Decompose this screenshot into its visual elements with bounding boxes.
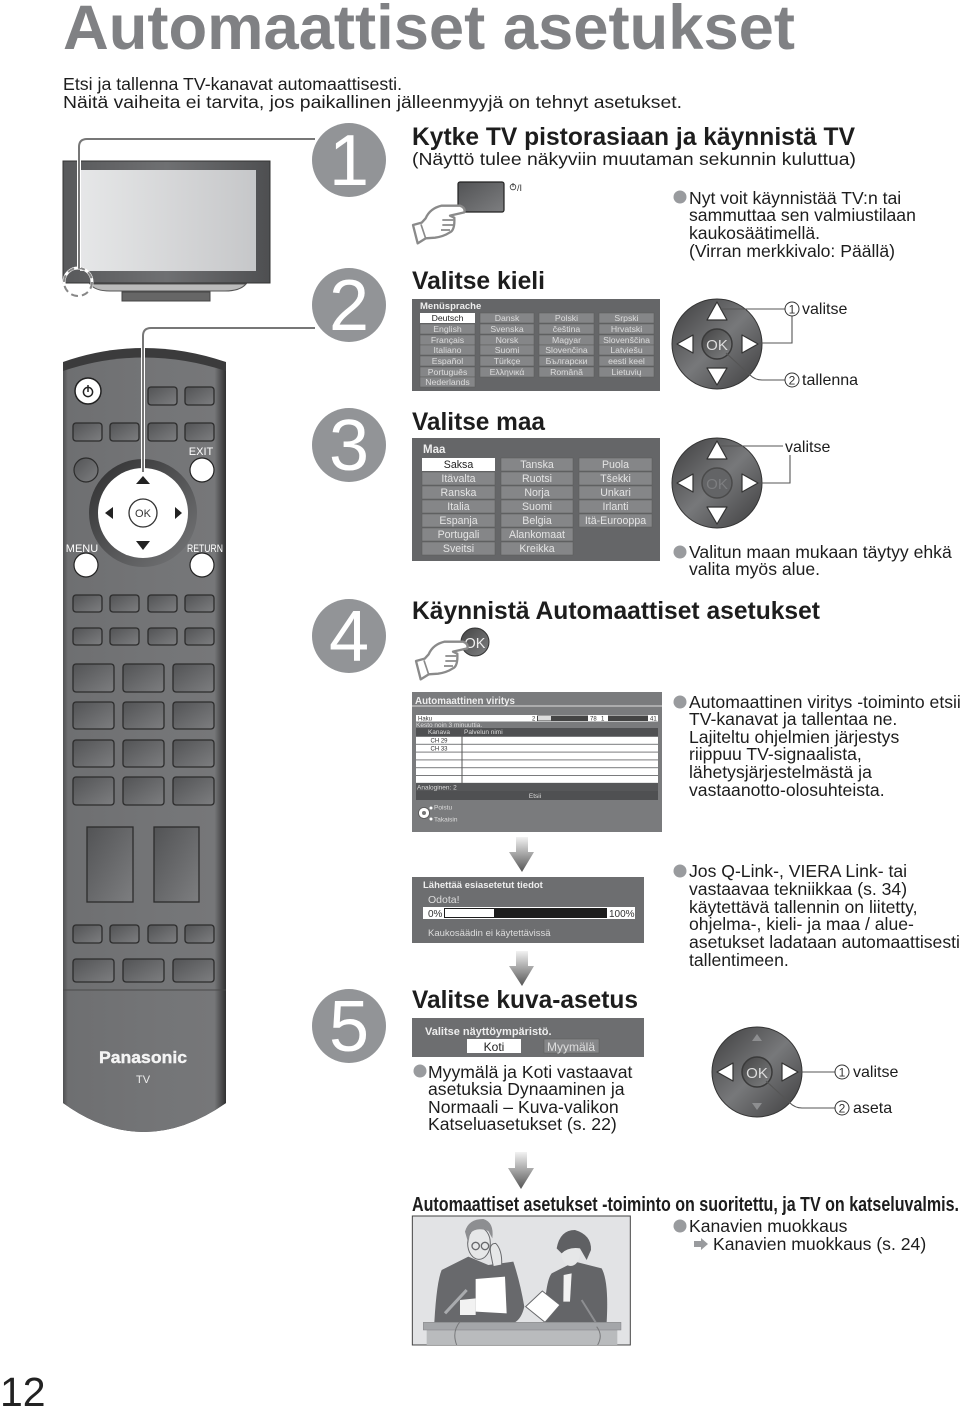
arrow: down bbox=[509, 837, 534, 872]
channel table: Palvelun nimi bbox=[464, 729, 503, 736]
panel: country menu: Sveitsi bbox=[443, 543, 474, 555]
intro text: Etsi ja tallenna TV-kanavat automaattisesti. bbox=[63, 74, 402, 94]
panel: country menu: Espanja bbox=[439, 515, 478, 527]
panel: country menu: Italia bbox=[447, 501, 470, 513]
panel: country menu: Itävalta bbox=[441, 473, 476, 485]
panel: viewing environment: Myymälä bbox=[547, 1040, 595, 1054]
EXIT button: EXIT bbox=[189, 446, 214, 458]
bullet note: Q-Link: ohjelma-, kieli- ja maa / alue- bbox=[689, 914, 914, 934]
duration note: Kesto noin 3 minuuttia. bbox=[416, 722, 482, 729]
bullet note: Q-Link: Jos Q-Link-, VIERA Link- tai bbox=[689, 861, 907, 881]
TV power button bbox=[458, 182, 522, 212]
channel table: Kanava bbox=[428, 729, 450, 736]
panel: language menu: Hrvatski bbox=[611, 324, 642, 334]
callouts: valitse and aseta bbox=[766, 1064, 898, 1117]
panel: country menu: Belgia bbox=[522, 515, 552, 527]
MENU button bbox=[66, 543, 98, 577]
step 1 heading: Kytke TV pistorasiaan ja käynnistä TV bbox=[412, 123, 855, 151]
panel: country menu: Maa bbox=[423, 444, 446, 456]
intro text: Näitä vaiheita ei tarvita, jos paikallinen jälleenmyyjä on tehnyt asetukset. bbox=[63, 92, 682, 112]
callouts: valitse and tallenna: 2 bbox=[789, 374, 796, 388]
bullet note: power: kaukosäätimellä. bbox=[689, 223, 820, 243]
bullet note: power: sammuttaa sen valmiustilaan bbox=[689, 205, 916, 225]
icon: OK button bbox=[461, 628, 489, 656]
bullet note: tuning: TV-kanavat ja tallentaa ne. bbox=[689, 709, 897, 729]
d-pad: picture select: OK bbox=[746, 1065, 768, 1082]
bullet note: Q-Link: vastaavaa tekniikkaa (s. 34) bbox=[689, 879, 907, 899]
bullet note: Q-Link: tallentimeen. bbox=[689, 950, 789, 970]
callouts: valitse and aseta: valitse bbox=[853, 1064, 898, 1081]
key hints: Poistu bbox=[434, 804, 452, 812]
callouts: valitse and tallenna bbox=[720, 301, 858, 389]
panel: language menu: eesti keel bbox=[608, 356, 645, 366]
d-pad: language select: OK bbox=[706, 337, 728, 354]
remote d-pad bbox=[89, 459, 197, 567]
panel: country menu: Portugali bbox=[438, 529, 479, 541]
panel: viewing environment: Valitse näyttöympäristö. bbox=[425, 1026, 552, 1038]
panel: language menu: Slovenčina bbox=[545, 345, 588, 355]
heading: start: Käynnistä Automaattiset asetukset bbox=[412, 597, 821, 625]
panel: language menu: English bbox=[433, 324, 462, 334]
arrow: down bbox=[509, 951, 534, 986]
bullet note: tuning: lähetysjärjestelmästä ja bbox=[689, 762, 872, 782]
key hints bbox=[418, 804, 458, 824]
panel: language menu: Norsk bbox=[496, 335, 519, 345]
callout: valitse: valitse bbox=[785, 439, 830, 456]
d-pad: picture select bbox=[712, 1027, 802, 1117]
panel: language menu: Menüsprache bbox=[420, 301, 481, 312]
bullet note: picture: asetuksia Dynaaminen ja bbox=[428, 1079, 625, 1099]
panel: viewing environment bbox=[412, 1018, 644, 1057]
bullet note: Q-Link bbox=[674, 861, 960, 970]
icon: pointing hand bbox=[413, 206, 465, 243]
panel: country menu: Puola bbox=[602, 459, 629, 471]
panel: country menu: Ranska bbox=[441, 487, 477, 499]
panel: country menu: Saksa bbox=[444, 459, 473, 471]
icon: OK button: OK bbox=[465, 636, 486, 652]
EXIT button bbox=[189, 446, 214, 482]
d-pad: country select bbox=[672, 438, 762, 528]
panel: language menu: Svenska bbox=[490, 324, 524, 334]
panel: country menu bbox=[412, 438, 660, 561]
callouts: valitse and tallenna: 1 bbox=[789, 302, 796, 316]
panel: language menu: Български bbox=[546, 356, 588, 366]
panel: language menu: Polski bbox=[555, 313, 578, 323]
progress bar bbox=[423, 907, 635, 920]
bullet note: tuning: Automaattinen viritys -toiminto etsii bbox=[689, 692, 960, 712]
panel: language menu: Latviešu bbox=[610, 345, 643, 355]
panel: language menu: Français bbox=[431, 335, 465, 345]
panel: country menu: Suomi bbox=[522, 501, 552, 513]
channel table: CH 29 bbox=[430, 738, 448, 744]
panel: language menu: Lietuvių bbox=[612, 367, 642, 377]
panel: language menu: Suomi bbox=[495, 345, 519, 355]
panel: language menu: Español bbox=[432, 356, 463, 366]
panel: sending presets: Odota! bbox=[428, 894, 460, 906]
panel: language menu: Slovenščina bbox=[603, 335, 650, 345]
callouts: valitse and aseta: 1 bbox=[839, 1066, 846, 1080]
panel: country menu: Unkari bbox=[600, 487, 631, 499]
panel: auto tuning bbox=[412, 692, 662, 832]
panel: country menu: Itä-Eurooppa bbox=[585, 515, 646, 527]
step 1 subheading: (Näyttö tulee näkyviin muutaman sekunnin kuluttua) bbox=[412, 149, 856, 169]
remote d-pad: OK bbox=[135, 508, 152, 520]
panel: country menu: Irlanti bbox=[603, 501, 628, 513]
panel: language menu bbox=[412, 299, 660, 391]
search progress row: 1 bbox=[601, 716, 605, 722]
heading: country: Valitse maa bbox=[412, 408, 546, 436]
status rows bbox=[416, 783, 658, 800]
progress bar: 100% bbox=[609, 909, 635, 920]
arrow: down bbox=[508, 1152, 534, 1189]
panel: country menu: Norja bbox=[524, 487, 550, 499]
panel: language menu: Deutsch bbox=[432, 313, 464, 323]
search progress row bbox=[416, 715, 658, 722]
panel: language menu: Italiano bbox=[433, 345, 462, 355]
panel: country menu: Tšekki bbox=[600, 473, 631, 485]
panel: language menu: Srpski bbox=[614, 313, 639, 323]
search progress row: 41 bbox=[650, 716, 657, 722]
bullet note: picture bbox=[414, 1062, 632, 1134]
bullet note: picture: Myymälä ja Koti vastaavat bbox=[428, 1062, 632, 1082]
bullet note: region bbox=[674, 542, 952, 579]
bullet note: region: valita myös alue. bbox=[689, 559, 820, 579]
bullet note: tuning bbox=[674, 692, 960, 800]
step number 2 bbox=[312, 266, 386, 346]
step number 5 bbox=[312, 987, 386, 1067]
bullet note: power: Nyt voit käynnistää TV:n tai bbox=[689, 188, 901, 208]
bullet note: Q-Link: käytettävä tallennin on liitetty, bbox=[689, 897, 918, 917]
step number 1: 1 bbox=[329, 121, 369, 201]
bullet note: power bbox=[674, 188, 916, 261]
panel: sending presets bbox=[412, 877, 644, 943]
panel: country menu: Alankomaat bbox=[509, 529, 565, 541]
step number 4 bbox=[312, 597, 386, 677]
heading: language: Valitse kieli bbox=[412, 267, 545, 295]
panel: language menu: Dansk bbox=[495, 313, 520, 323]
panel: viewing environment: Koti bbox=[484, 1040, 504, 1054]
callouts: valitse and tallenna: valitse bbox=[802, 301, 847, 318]
bullet note: channel editing: Kanavien muokkaus (s. 24) bbox=[713, 1234, 926, 1254]
callouts: valitse and tallenna: tallenna bbox=[802, 372, 858, 389]
brand: TV bbox=[136, 1074, 151, 1086]
panel: country menu: Kreikka bbox=[519, 543, 555, 555]
channel table bbox=[416, 728, 658, 783]
bullet note: channel editing bbox=[674, 1216, 926, 1254]
bullet note: Q-Link: asetukset ladataan automaattisesti bbox=[689, 932, 960, 952]
callouts: valitse and aseta: 2 bbox=[839, 1102, 846, 1116]
status rows: Analoginen: 2 bbox=[417, 784, 457, 792]
bullet note: picture: Normaali – Kuva-valikon bbox=[428, 1097, 619, 1117]
bullet note: power: (Virran merkkivalo: Päällä) bbox=[689, 241, 895, 261]
RETURN button: RETURN bbox=[187, 543, 223, 555]
d-pad: country select: OK bbox=[706, 476, 728, 493]
panel: language menu: Ελληνικά bbox=[490, 367, 524, 377]
step number 3: 3 bbox=[329, 406, 369, 486]
panel: sending presets: Lähettää esiasetetut tiedot bbox=[423, 880, 544, 891]
search progress row: 2 bbox=[532, 716, 536, 722]
panel: language menu: Português bbox=[428, 367, 468, 377]
remote buttons lower bbox=[73, 595, 214, 982]
panel: language menu: Magyar bbox=[552, 335, 581, 345]
illustration: presenters bbox=[412, 1216, 630, 1345]
brand: Panasonic bbox=[99, 1048, 187, 1067]
step number 4: 4 bbox=[329, 597, 369, 677]
channel table: CH 33 bbox=[430, 746, 448, 752]
connector: TV to step 1 bbox=[79, 139, 315, 268]
connector: remote to step 2 bbox=[143, 328, 315, 472]
panel: sending presets: Kaukosäädin ei käytettävissä bbox=[428, 928, 551, 939]
MENU button: MENU bbox=[66, 543, 98, 555]
key hints: Takaisin bbox=[434, 816, 458, 824]
bullet note: tuning: Lajiteltu ohjelmien järjestys bbox=[689, 727, 899, 747]
illustration: TV bbox=[63, 161, 270, 301]
icon: pointing hand bbox=[416, 642, 468, 679]
panel: country menu: Tanska bbox=[520, 459, 554, 471]
TV power button: /I bbox=[517, 183, 522, 193]
heading: picture setting: Valitse kuva-asetus bbox=[412, 986, 638, 1014]
panel: country menu: Ruotsi bbox=[522, 473, 552, 485]
step number 2: 2 bbox=[329, 266, 369, 346]
intro text bbox=[63, 74, 682, 112]
brand bbox=[99, 1048, 187, 1086]
status rows: Etsii bbox=[529, 793, 541, 800]
power button bbox=[75, 378, 101, 404]
panel: language menu: čeština bbox=[553, 324, 580, 334]
panel: language menu: Türkçe bbox=[494, 356, 520, 366]
bullet note: region: Valitun maan mukaan täytyy ehkä bbox=[689, 542, 952, 562]
bullet note: tuning: riippuu TV-signaalista, bbox=[689, 744, 862, 764]
d-pad: language select bbox=[672, 299, 762, 389]
search progress row: Haku bbox=[418, 716, 432, 722]
remote control bbox=[63, 348, 226, 1132]
bullet note: picture: Katseluasetukset (s. 22) bbox=[428, 1114, 617, 1134]
bullet note: channel editing: Kanavien muokkaus bbox=[689, 1216, 848, 1236]
step number 1 bbox=[312, 121, 386, 201]
bullet note: tuning: vastaanotto-olosuhteista. bbox=[689, 780, 885, 800]
panel: language menu: Română bbox=[550, 367, 583, 377]
progress bar: 0% bbox=[428, 909, 443, 920]
step number 3 bbox=[312, 406, 386, 486]
callout: valitse bbox=[720, 439, 830, 483]
search progress row: 78 bbox=[590, 716, 597, 722]
step number 5: 5 bbox=[329, 987, 369, 1067]
panel: auto tuning: Automaattinen viritys bbox=[415, 696, 515, 707]
remote buttons upper bbox=[73, 387, 214, 482]
callouts: valitse and aseta: aseta bbox=[853, 1100, 892, 1117]
panel: language menu: Nederlands bbox=[425, 377, 470, 387]
RETURN button bbox=[187, 543, 223, 577]
